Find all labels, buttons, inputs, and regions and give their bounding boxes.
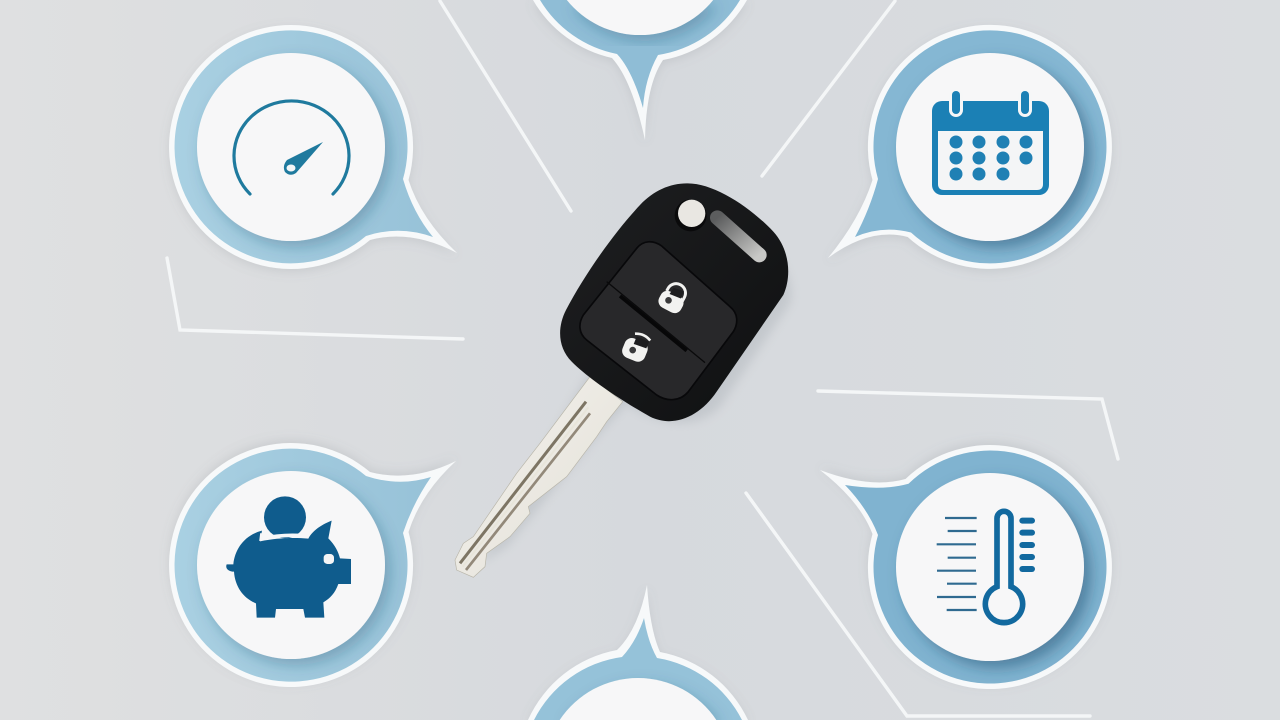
key shadow bbox=[480, 203, 791, 563]
icon: speedometer gauge bbox=[234, 101, 349, 194]
key fob body bbox=[560, 183, 788, 421]
icon: thermometer bbox=[937, 511, 1035, 623]
key ring slot bbox=[717, 218, 759, 255]
callout: thermometer bbox=[820, 445, 1112, 689]
car key bbox=[455, 183, 791, 577]
callout: top partial bubble bbox=[533, 0, 747, 140]
callout: speedometer bbox=[169, 25, 457, 269]
icon: piggy bank bbox=[226, 496, 351, 618]
button panel bbox=[580, 242, 737, 400]
connector lines bbox=[167, 1, 1118, 716]
callout: piggy bank bbox=[169, 443, 456, 687]
callout: calendar bbox=[828, 25, 1112, 269]
metal rivet bbox=[675, 199, 707, 231]
callout: bottom partial bubble bbox=[528, 585, 748, 720]
key blade bbox=[455, 377, 623, 577]
icon: unlock button bbox=[620, 330, 652, 364]
icon: lock button bbox=[656, 279, 691, 316]
icon: calendar bbox=[932, 90, 1049, 195]
